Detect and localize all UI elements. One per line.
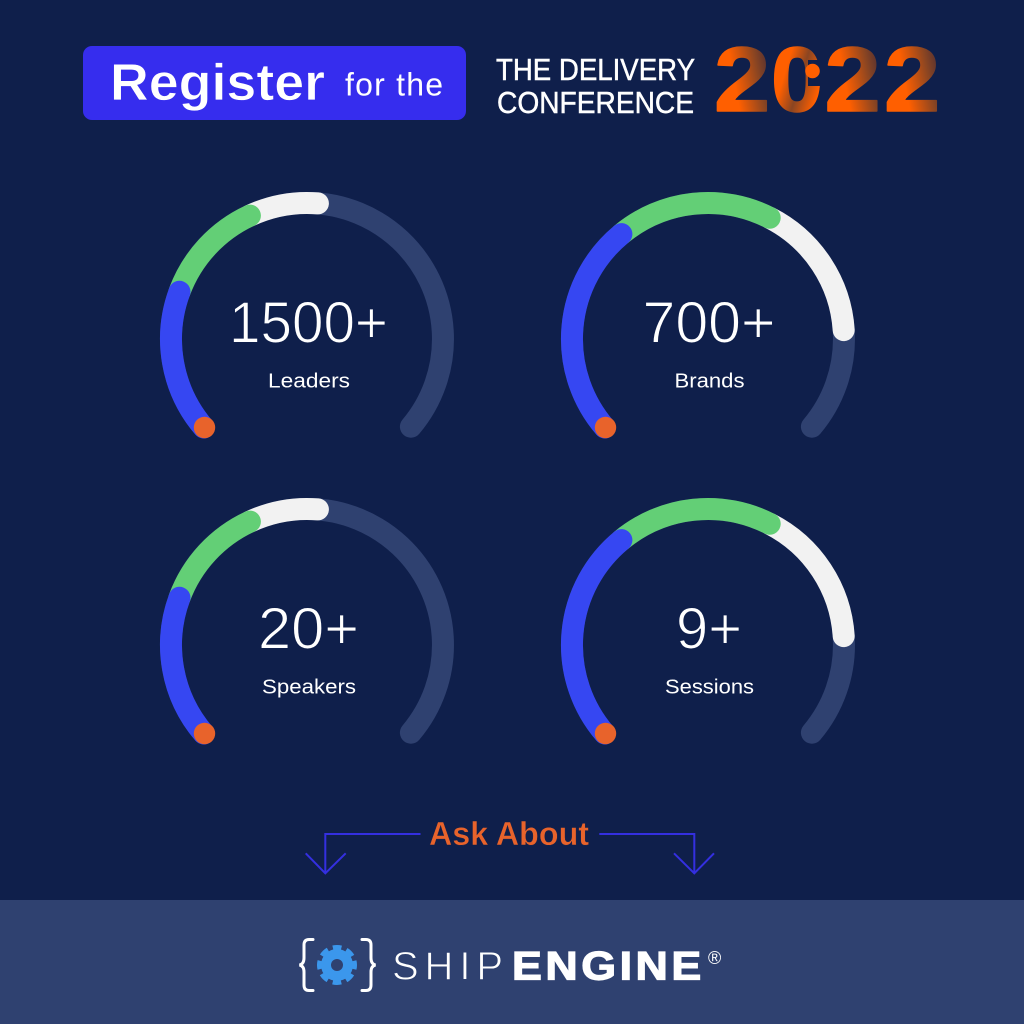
blue segment: [171, 292, 204, 428]
registered mark: ®: [708, 948, 721, 968]
orange start dot: [194, 417, 215, 438]
shipengine logo: [300, 940, 721, 990]
conference year 2022: 2: [714, 28, 770, 131]
white segment: [250, 509, 318, 522]
orange start dot: [595, 723, 616, 744]
gauge track: [572, 203, 844, 428]
shipengine logo: ENGINE: [512, 944, 701, 988]
label: Speakers: [262, 676, 356, 698]
gauge track: [572, 509, 844, 734]
blue segment: [572, 540, 621, 734]
wordmark: SHIP: [392, 944, 503, 988]
conference year 2022: [714, 28, 940, 131]
gauge: 700+ brands: [572, 203, 844, 438]
white segment: [770, 524, 844, 636]
register banner: for the: [345, 66, 443, 102]
conference name: THE DELIVERY: [496, 52, 695, 87]
green segment: [180, 522, 250, 598]
gauge track: [171, 203, 443, 428]
blue segment: [171, 598, 204, 734]
icon: braces and gear: [300, 940, 376, 990]
conference year 2022: 2: [824, 28, 881, 131]
value: 700+: [642, 290, 776, 356]
register banner: [83, 46, 466, 120]
label: Leaders: [268, 370, 350, 392]
ask about heading: Ask About: [429, 815, 589, 852]
arrow: left: [306, 834, 420, 873]
green segment: [180, 216, 250, 292]
white segment: [250, 203, 318, 216]
register banner: Register: [110, 54, 325, 112]
conference year 2022: 0: [771, 28, 823, 131]
blue segment: [572, 234, 621, 428]
arrow: right: [599, 834, 714, 873]
green segment: [621, 203, 770, 234]
label: Sessions: [665, 676, 754, 698]
value: 20+: [258, 596, 359, 662]
gauge: 9+ sessions: [572, 509, 844, 744]
conference year 2022: 2: [884, 28, 940, 131]
green segment: [621, 509, 770, 540]
gauge: 20+ speakers: [171, 509, 443, 744]
label: Brands: [674, 370, 744, 392]
conference name: CONFERENCE: [497, 85, 694, 120]
footer band: [0, 900, 1024, 1024]
gauge track: [171, 509, 443, 734]
orange start dot: [194, 723, 215, 744]
gauge: 1500+ leaders: [171, 203, 443, 438]
conference name: [496, 52, 695, 120]
orange start dot: [595, 417, 616, 438]
white segment: [770, 218, 844, 330]
value: 1500+: [229, 290, 388, 356]
value: 9+: [676, 596, 742, 662]
